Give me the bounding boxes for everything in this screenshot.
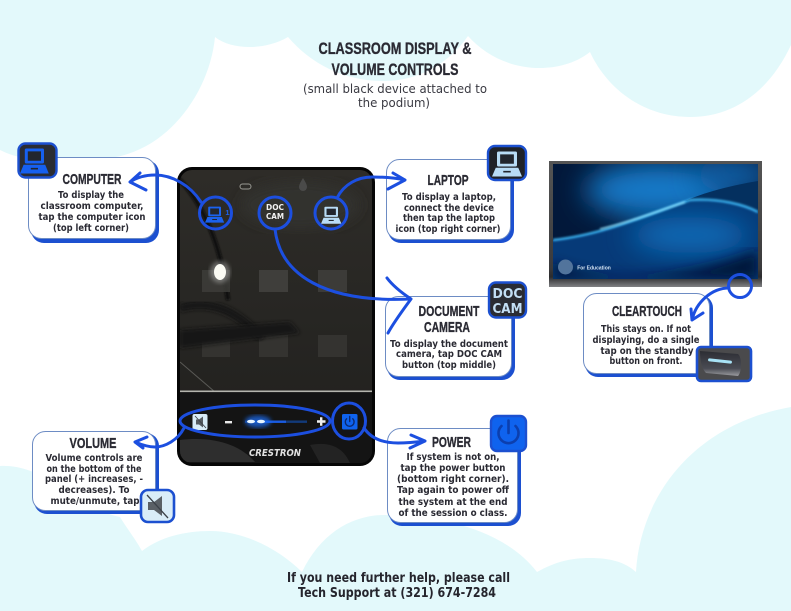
education badge [558, 260, 573, 274]
icon: doc cam [489, 282, 526, 318]
body text: mute/unmute, tap [50, 496, 140, 507]
arrow: doc cam [275, 229, 411, 333]
body text [397, 452, 510, 519]
icon: doc cam: DOC [492, 287, 522, 302]
body text: camera, tap DOC CAM [396, 349, 502, 360]
device photo screen [178, 170, 372, 464]
arrow: cleartouch [691, 288, 729, 320]
title [318, 39, 472, 79]
icon: doc cam: CAM [492, 302, 522, 317]
body text: This stays on. If not [601, 324, 691, 335]
icon: computer [18, 144, 56, 178]
background: bottom cloud [0, 407, 791, 611]
body text: icon (top right corner) [396, 224, 500, 235]
icon: laptop on device [321, 207, 341, 224]
body text: tap the computer icon [38, 212, 146, 223]
body text: (top left corner) [53, 223, 129, 234]
body text: then tap the laptop [403, 213, 495, 224]
icon: standby button photo [697, 347, 751, 381]
label: computer number: 1 [225, 208, 230, 217]
education label: For Education [577, 266, 611, 272]
volume slider [245, 416, 307, 428]
panel box [32, 432, 159, 514]
body text: on the bottom of the [46, 464, 142, 475]
panel: document camera [386, 282, 526, 380]
panel: crestron device [177, 167, 375, 466]
body text: Tap again to power off [397, 485, 510, 496]
body text: connect the device [404, 203, 494, 214]
title: CLASSROOM DISPLAY & [318, 39, 472, 58]
body text: button on front. [610, 356, 682, 367]
icon: mute button [192, 414, 208, 430]
icon: mute [141, 490, 174, 522]
panel box [386, 296, 515, 380]
arrow: volume [135, 428, 184, 448]
body text: the system at the end [398, 497, 508, 508]
arrow: laptop [337, 173, 405, 198]
ring: standby button [728, 274, 752, 298]
body text [396, 192, 500, 235]
arrow: power [364, 428, 425, 448]
ring: volume controls [180, 405, 330, 437]
monitor frame [549, 161, 762, 287]
body text: classroom computer, [40, 201, 144, 212]
body text: If system is not on, [406, 452, 500, 463]
body text: tap on the standby [600, 346, 694, 357]
heading: DOCUMENT [418, 303, 480, 320]
heading: CAMERA [424, 319, 470, 336]
icon: power button on device [342, 414, 358, 430]
arrow: computer [130, 173, 201, 202]
panel: cleartouch [584, 294, 751, 381]
panel: power [388, 416, 526, 526]
body text [45, 453, 143, 507]
heading: LAPTOP [428, 172, 468, 189]
body text: To display the [58, 190, 124, 201]
body text: Volume controls are [46, 453, 143, 464]
ring: computer button [200, 197, 232, 229]
heading: CLEARTOUCH [612, 303, 682, 320]
device sensors [240, 178, 307, 191]
body text: tap the power button [400, 463, 506, 474]
subtitle: (small black device attached to [303, 81, 487, 96]
body text: (bottom right corner). [397, 474, 509, 485]
panel box [388, 428, 521, 526]
icon: laptop [488, 146, 526, 180]
footer help text: If you need further help, please call [287, 571, 510, 586]
label: doc cam button: CAM [266, 212, 284, 221]
body text: displaying, do a single [592, 335, 700, 346]
body text [390, 339, 508, 371]
panel box [584, 294, 713, 377]
panel box [28, 158, 159, 243]
device body [177, 167, 375, 466]
label: doc cam button [266, 203, 284, 221]
body text: button (top middle) [402, 360, 496, 371]
panel: computer [18, 144, 159, 243]
footer help text [287, 571, 510, 601]
ring: laptop button [315, 197, 347, 229]
ring: doc cam button [259, 197, 291, 229]
background: top cloud [0, 0, 791, 161]
icon: power [491, 416, 526, 451]
body text [38, 190, 146, 234]
minus sign [225, 421, 232, 423]
body text: of the session o class. [398, 508, 508, 519]
heading: VOLUME [70, 435, 116, 452]
heading: COMPUTER [62, 171, 122, 188]
body text [592, 324, 700, 367]
body text: decreases). To [58, 485, 130, 496]
label: doc cam button: DOC [266, 203, 284, 212]
panel: laptop [386, 146, 526, 243]
body text: To display a laptop, [402, 192, 496, 203]
icon: computer on device [205, 207, 224, 223]
panel box [386, 160, 514, 243]
plus sign [317, 417, 326, 426]
subtitle [303, 81, 487, 110]
footer help text: Tech Support at (321) 674-7284 [298, 586, 496, 601]
body text: panel (+ increases, - [45, 474, 143, 485]
cleartouch monitor [549, 157, 775, 287]
monitor screen [553, 164, 758, 279]
heading: POWER [432, 434, 471, 451]
body text: To display the document [390, 339, 508, 350]
panel: volume [32, 432, 174, 522]
ring: power button [332, 403, 366, 439]
divider line [180, 390, 372, 392]
brand: crestron: CRESTRON [249, 448, 301, 459]
title: VOLUME CONTROLS [332, 60, 458, 79]
heading [418, 303, 480, 336]
subtitle: the podium) [358, 95, 430, 110]
